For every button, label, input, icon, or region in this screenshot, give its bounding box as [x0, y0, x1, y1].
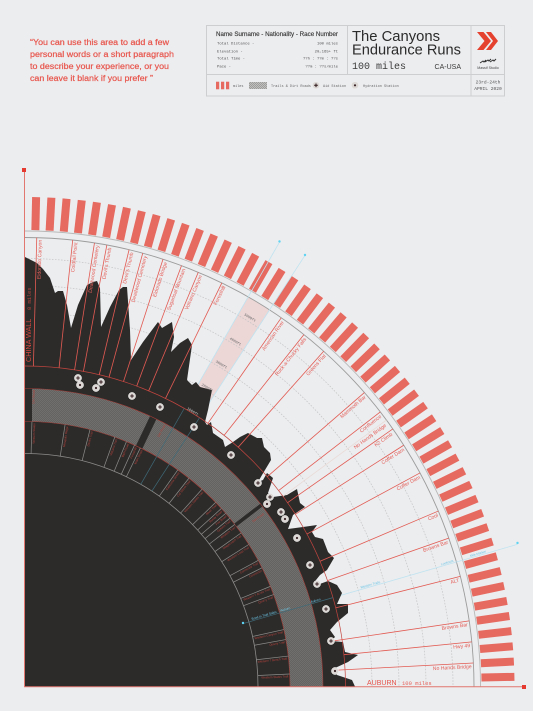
checkpoint lines and labels: Greens Flat [305, 353, 328, 377]
legend: miles [216, 82, 244, 89]
elevation labels [186, 313, 257, 418]
stats rows: Elevation - [217, 49, 243, 54]
checkpoint lines and labels: Volcano Canyon [184, 274, 204, 311]
checkpoint lines and labels: Eldorado Bridge [152, 261, 169, 298]
mile bars ring [31, 197, 514, 681]
vertical axis [22, 168, 26, 687]
stats rows: Pace - [217, 65, 231, 69]
legend: aid station: Aid Station [323, 84, 346, 89]
checkpoint lines and labels: Devil's Thumb [122, 252, 135, 284]
elevation labels: 2000ft [200, 383, 214, 394]
elevation labels: 4000ft [228, 337, 242, 348]
band labels: Dirt Road [31, 390, 36, 404]
finish label: 100 miles [402, 680, 432, 687]
checkpoint lines and labels: Deadwood Cemetery [88, 245, 101, 293]
checkpoint lines and labels [33, 238, 474, 677]
checkpoint lines and labels: ALT [450, 578, 460, 586]
checkpoint lines and labels: No Hands Bridge [433, 664, 472, 672]
inner trail section lines and labels: Western States Trail [261, 674, 289, 680]
inner trail section lines and labels: Cal Street Trail [176, 479, 192, 498]
stats rows: Total Time - [217, 57, 245, 62]
quote text block: can leave it blank if you prefer ” [30, 74, 153, 83]
checkpoint lines and labels: K2 Climb [374, 432, 394, 449]
inner trail section lines and labels: Devil's Trail [86, 431, 94, 447]
inner trail section lines and labels: Connector Trail [239, 561, 259, 575]
blue marker labels: Auburn [280, 606, 291, 613]
checkpoint lines and labels: Browns Bar [441, 622, 469, 632]
studio name: Massif Studio [477, 66, 499, 70]
stats rows: ??h : ??m : ??s [303, 57, 339, 62]
quote text block [30, 38, 174, 83]
inner trail section lines and labels: Western 7 Bench Trail [258, 656, 288, 664]
inner trail section lines and labels: California Street [165, 471, 180, 491]
panel frame [206, 26, 504, 96]
checkpoint lines and labels: Hwy 49 [453, 643, 471, 651]
horizontal axis [24, 685, 526, 689]
checkpoint lines and labels: Browns Bar [422, 540, 449, 554]
elevation profile [25, 257, 358, 686]
band labels [31, 390, 265, 523]
inner trail section lines and labels: Greens Trail [216, 519, 232, 533]
quote text block: personal words or a short paragraph [30, 50, 174, 59]
checkpoint lines and labels: Confluence [359, 414, 383, 434]
band labels: Dirt Road [251, 512, 265, 523]
start label: 0 miles [27, 287, 33, 310]
inner trail section lines and labels: Western 7 Acres Trail [243, 587, 271, 602]
start label [24, 287, 33, 362]
race date: 23rd-24th [476, 80, 501, 86]
band gap 2 [235, 505, 261, 525]
light blue marker lines [184, 243, 517, 598]
legend: trails and dirt roads: Trails & Dirt Roads [271, 84, 311, 89]
blue marker labels: Bowl in Trail Sales [251, 610, 278, 621]
checkpoint lines and labels: Mammoth Bar [339, 394, 368, 420]
legend: aid station [312, 82, 346, 89]
race title: Endurance Runs [352, 42, 461, 58]
inner trail section lines and labels: Volcano Trail [109, 438, 118, 456]
inner trail section lines and labels: Main Street [133, 449, 144, 465]
inner trail section lines and labels: River Trail [205, 503, 218, 516]
elevation labels: 1000ft [186, 407, 199, 418]
inner trail section lines and labels: Western Trail [220, 525, 236, 540]
start label: CHINA WALL [24, 319, 33, 362]
blue marker labels: Auburn [310, 597, 321, 604]
legend: trails and dirt roads [249, 82, 311, 89]
inner trail section lines and labels: Stagecoach Trail [222, 534, 243, 550]
blue marker endpoints [242, 240, 519, 624]
inner trail section lines and labels: Quarry Trail [258, 595, 274, 605]
checkpoint lines and labels: Coffer Dam [381, 447, 406, 466]
elevation labels: 3000ft [214, 360, 228, 371]
runner name: Name Surname - Nationality - Race Number [216, 32, 338, 38]
blue marker labels: Lookouts [440, 559, 454, 566]
checkpoint lines and labels: Deadwood Cemetery [131, 255, 149, 303]
stats rows: 20,165+ ft [315, 49, 338, 54]
checkpoint lines and labels: Foresthill [213, 285, 227, 306]
checkpoint lines and labels: No Hands Bridge [353, 423, 388, 451]
checkpoint lines and labels: Coldfall Point [70, 242, 80, 273]
inner trail section lines and labels: Rucky Road [208, 510, 223, 524]
inner trail section lines and labels: Western States Trail [183, 490, 204, 513]
checkpoint lines and labels: Devil's Thumb [102, 247, 113, 280]
blue marker labels [251, 549, 487, 621]
stats rows [217, 42, 339, 69]
band start gap [25, 388, 32, 422]
checkpoint lines and labels: Ruck-a-Chucky Falls [274, 336, 308, 377]
highlighted elevation wedge [184, 297, 270, 418]
blue marker labels: Mile Marker [469, 549, 487, 558]
race distance: 100 miles [352, 61, 406, 73]
trail and dirt road band [25, 366, 346, 686]
stats rows: Total Distance - [217, 42, 254, 46]
checkpoint lines and labels: American River [261, 320, 286, 352]
finish label: AUBURN [367, 680, 397, 687]
band labels: Dirt Road [157, 424, 167, 438]
checkpoint lines and labels: Cool [427, 513, 439, 522]
legend: hydration station: Hydration Station [363, 84, 399, 89]
aid and hydration station markers [74, 374, 339, 675]
race title [352, 29, 461, 58]
elevation labels: 5000ft [243, 313, 257, 324]
inner trail section lines and labels [31, 422, 290, 680]
inner trail section lines and labels: Foresthill [129, 446, 138, 459]
band gap 1 [139, 418, 153, 447]
checkpoint lines and labels: Sugarloaf Mountain [166, 268, 187, 311]
icon: double chevron logo [477, 32, 498, 50]
finish label [367, 680, 432, 687]
blue marker lines over dark [141, 408, 333, 623]
inner trail section lines and labels: Mosquito Ridge [62, 426, 69, 447]
stats rows: 100 miles [317, 42, 339, 46]
race date: APRIL 2020 [474, 86, 502, 92]
checkpoint lines and labels: Coffer Dam [396, 475, 422, 492]
stats rows: ??m : ??s/mile [305, 64, 339, 69]
race title: The Canyons [352, 29, 440, 45]
inner trail section lines and labels: Fire Road [215, 514, 228, 526]
icon: studio squiggle mark [480, 59, 496, 63]
blue marker labels: Western Trails [360, 580, 381, 589]
legend: miles: miles [233, 84, 244, 89]
quote text block: to describe your experience, or you [30, 62, 169, 71]
inner trail section lines and labels: Western Loop Trail [226, 545, 250, 562]
race date [474, 80, 502, 92]
inner trail section lines and labels: Quarry Trail [269, 640, 285, 647]
inner disk edge [25, 454, 258, 686]
checkpoint lines and labels: Eldorado Canyon [37, 240, 44, 279]
legend: hydration station [351, 82, 399, 89]
inner trail section lines and labels: Connector [248, 569, 263, 579]
header info panel [206, 26, 504, 96]
inner trail section lines and labels: Bath Road [121, 443, 130, 458]
location: CA-USA [435, 64, 461, 71]
inner trail section lines and labels: Western Canyon Trail [254, 630, 284, 640]
quote text block: “You can use this area to add a few [30, 38, 169, 47]
inner trail section lines and labels: Western States [32, 423, 36, 444]
